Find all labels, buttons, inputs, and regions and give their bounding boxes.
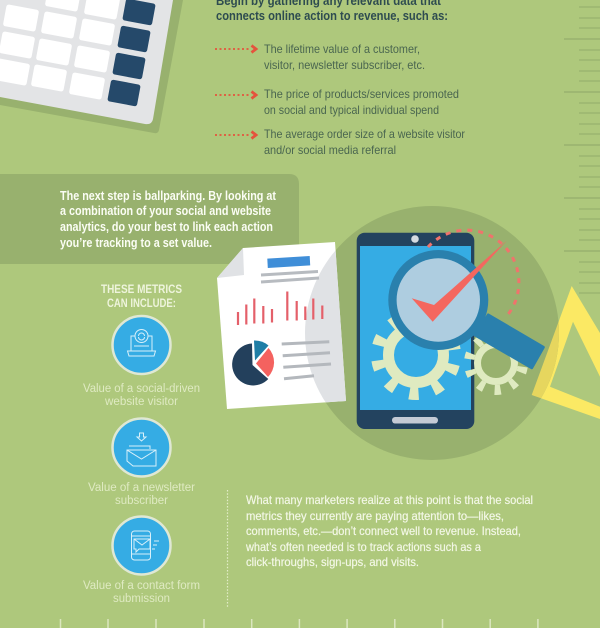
closing paragraph: [245, 493, 533, 569]
triangle shaded overlap: [532, 322, 559, 398]
list item: lifetime value: visitor, newsletter subscriber, etc.: [264, 58, 425, 72]
pie chart: [232, 340, 274, 385]
document heading lines: [261, 272, 319, 282]
metric: website visitor: Value of a social-driven: [83, 383, 200, 395]
bar chart: [238, 292, 322, 325]
list item: product price: on social and typical individual spend: [264, 103, 439, 117]
icon: large gear: [370, 309, 462, 401]
metrics heading: [101, 282, 182, 310]
list item: lifetime value: The lifetime value of a customer,: [264, 42, 420, 56]
metric: website visitor: [83, 316, 200, 408]
background circle: [305, 206, 559, 460]
document text lines: [282, 342, 331, 379]
panel: ballparking: analytics, do your best to link each action: [60, 219, 273, 234]
metric: contact form: Value of a contact form: [83, 580, 200, 592]
smartphone: [357, 233, 474, 429]
metrics heading: THESE METRICS: [101, 282, 182, 296]
icon: laptop with refresh: [128, 330, 156, 356]
metric: newsletter subscriber: subscriber: [115, 495, 168, 507]
list item: average order size: [215, 127, 465, 157]
icon: envelope with arrow: [127, 433, 156, 466]
panel: ballparking: a combination of your social and website: [60, 203, 271, 218]
dashed red arc: [428, 230, 519, 318]
icon: magnifying glass: [388, 250, 543, 368]
metric: contact form: [83, 516, 200, 605]
report document: [217, 242, 346, 409]
metric: website visitor: website visitor: [104, 396, 178, 408]
list item: average order size: The average order size of a website visitor: [264, 127, 465, 141]
panel: ballparking: [0, 174, 299, 264]
intro text: connects online action to revenue, such as:: [216, 9, 448, 23]
panel: ballparking: you’re tracking to a set value.: [60, 235, 212, 250]
closing paragraph: comments, etc.—don’t connect well to revenue. Instead,: [246, 524, 521, 538]
closing paragraph: metrics they currently are paying attention to—likes,: [246, 509, 504, 523]
list of revenue data: [215, 42, 465, 157]
closing paragraph: what’s often needed is to track actions such as a: [245, 540, 481, 554]
icon: small gear: [466, 333, 526, 393]
list item: product price: The price of products/services promoted: [264, 87, 459, 101]
metric: contact form: submission: [113, 593, 170, 605]
metric: newsletter subscriber: [88, 418, 195, 507]
document heading bar: [267, 256, 310, 268]
icon: phone with message: [132, 531, 159, 560]
list item: average order size: and/or social media referral: [264, 143, 396, 157]
ruler ticks: right edge: [564, 7, 600, 293]
ruler ticks: bottom edge: [60, 619, 538, 628]
panel: ballparking: The next step is ballparking. By looking at: [60, 188, 277, 203]
list item: lifetime value: [215, 42, 425, 72]
intro text: [216, 0, 448, 23]
icon: calculator: [0, 0, 183, 133]
closing paragraph: What many marketers realize at this point is that the social: [246, 493, 533, 507]
list item: product price: [215, 87, 459, 117]
closing paragraph: click-throughs, sign-ups, and visits.: [246, 555, 419, 569]
metric: newsletter subscriber: Value of a newsletter: [88, 482, 195, 494]
icon: check mark: [412, 241, 507, 322]
metrics heading: CAN INCLUDE:: [107, 296, 176, 310]
yellow triangle ruler: [532, 286, 600, 419]
